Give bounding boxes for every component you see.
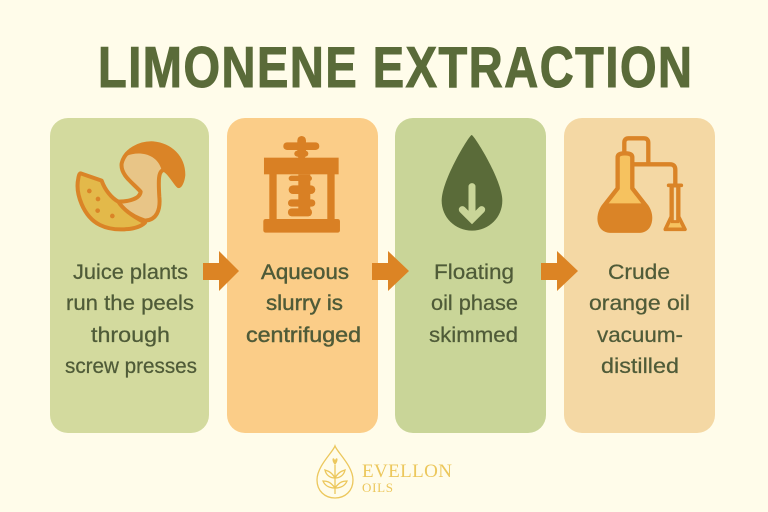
text: step 1: run the peels <box>66 292 194 315</box>
text: step 4: distilled <box>601 355 679 378</box>
arrow: step 1 to 2 <box>203 251 239 291</box>
text: step 4: orange oil <box>589 292 690 315</box>
text: step 3: skimmed <box>429 324 518 347</box>
logo wordmark: EVELLON <box>362 461 452 482</box>
logo: Evellon Oils <box>317 446 452 498</box>
text: step 4: Crude <box>608 261 670 284</box>
text: step 1: screw presses <box>65 355 197 378</box>
icon: orange peel <box>78 143 183 229</box>
text: step 3: oil phase <box>431 292 518 315</box>
icon: screw press <box>263 136 340 233</box>
icon: distillation flask <box>600 138 685 232</box>
text: step 2: centrifuged <box>246 324 361 347</box>
title: LIMONENE EXTRACTION <box>98 37 692 100</box>
text: step 2 <box>246 261 361 347</box>
text: step 4 <box>589 261 690 378</box>
icon: logo drop with sprig <box>317 446 353 498</box>
panel: step 4 distillation <box>564 118 715 433</box>
text: step 1: through <box>91 324 170 347</box>
text: step 3 <box>429 261 518 347</box>
logo subtext: OILS <box>362 480 393 495</box>
panel: step 3 skimming <box>395 118 546 433</box>
arrow: step 2 to 3 <box>372 251 409 291</box>
arrow: step 3 to 4 <box>541 251 578 291</box>
icon: oil drop with down arrow <box>442 135 502 231</box>
text: step 4: vacuum- <box>597 324 683 347</box>
text: step 1 <box>65 261 197 378</box>
text: step 3: Floating <box>434 261 514 284</box>
panel: step 1 peel pressing <box>50 118 209 433</box>
panel: step 2 centrifuge <box>227 118 378 433</box>
text: step 2: slurry is <box>266 292 343 315</box>
text: step 2: Aqueous <box>261 261 349 284</box>
text: step 1: Juice plants <box>73 261 188 284</box>
